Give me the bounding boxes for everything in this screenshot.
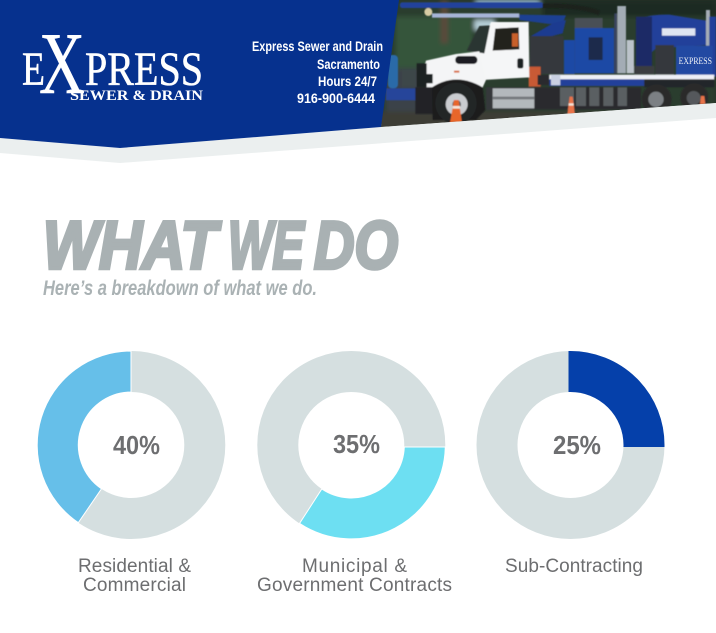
background trees and sky bbox=[376, 0, 716, 133]
logo: Express Sewer & Drain: PRESS bbox=[85, 43, 203, 96]
donut chart: municipal & government contracts 35% bbox=[257, 372, 452, 596]
logo: Express Sewer & Drain: X bbox=[39, 16, 85, 113]
logo: Express Sewer & Drain bbox=[22, 16, 203, 113]
label: Government Contracts bbox=[257, 575, 452, 596]
donut chart: residential & commercial 40% bbox=[37, 351, 205, 596]
black boxes bbox=[530, 36, 563, 74]
logo: Express Sewer & Drain: E bbox=[22, 43, 45, 96]
label bbox=[78, 556, 191, 596]
title: WE bbox=[228, 208, 306, 284]
label: Municipal & bbox=[302, 556, 407, 577]
tank bbox=[636, 15, 709, 67]
pump body bbox=[575, 18, 603, 29]
contact details bbox=[252, 38, 383, 106]
fuel tank bbox=[486, 87, 534, 110]
chassis bbox=[549, 75, 714, 80]
subtitle: Here’s a breakdown of what we do. bbox=[43, 277, 317, 300]
title: DO bbox=[314, 208, 398, 284]
contact details: Express Sewer and Drain bbox=[252, 38, 383, 54]
donut chart: sub-contracting 25%: 25% bbox=[553, 430, 601, 460]
cones bbox=[450, 100, 462, 123]
boom tube bbox=[400, 2, 543, 8]
logo: Express Sewer & Drain: SEWER & DRAIN bbox=[70, 88, 203, 104]
contact details: Sacramento bbox=[317, 56, 380, 72]
header photo: vacuum truck bbox=[376, 0, 716, 133]
donut chart: sub-contracting 25% bbox=[497, 372, 644, 577]
rear wheels bbox=[642, 86, 672, 108]
orange tank bbox=[529, 67, 541, 87]
contact details: 916-900-6444 bbox=[297, 90, 375, 106]
cab bbox=[478, 22, 529, 80]
donut chart: residential & commercial 40%: 40% bbox=[113, 430, 160, 460]
left machinery bbox=[388, 55, 398, 88]
header ribbon: grey shadow band bbox=[0, 103, 716, 163]
label bbox=[257, 556, 452, 596]
label: Commercial bbox=[83, 575, 186, 596]
contact details: Hours 24/7 bbox=[318, 73, 377, 89]
title bbox=[43, 208, 398, 284]
title: WHAT bbox=[43, 208, 222, 284]
donut chart: municipal & government contracts 35%: 35% bbox=[333, 429, 380, 459]
grille and bumper bbox=[417, 63, 427, 87]
label: Sub-Contracting bbox=[505, 556, 643, 577]
front wheel bbox=[435, 83, 477, 124]
hood bbox=[420, 51, 486, 87]
label: Residential & bbox=[78, 556, 191, 577]
header banner: blue shape bbox=[0, 0, 399, 148]
